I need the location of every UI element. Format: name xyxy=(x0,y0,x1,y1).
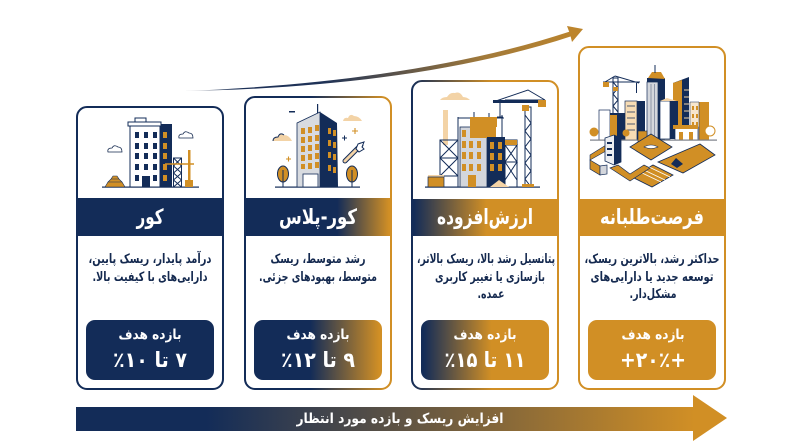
text: value add description: بازسازی یا تغییر کاربری xyxy=(435,270,545,285)
panel: core plus xyxy=(245,97,391,389)
target box: core plus: ۹ تا ۱۲٪ xyxy=(281,348,355,372)
target box: opportunistic: +۲۰٪+ xyxy=(620,348,686,372)
curved growth arrow xyxy=(184,26,583,91)
header: core plus: کور-پلاس xyxy=(279,205,358,229)
text: value add description: پتانسیل رشد بالا، ریسک بالاتر، xyxy=(417,252,555,267)
header: opportunistic xyxy=(579,199,725,236)
panel: core xyxy=(77,107,223,389)
target box: core: بازده هدف xyxy=(118,327,182,343)
icon: opportunistic development xyxy=(590,65,717,187)
text: core description xyxy=(88,250,212,285)
target box: value add: بازده هدف xyxy=(454,327,516,343)
text: opportunistic description: توسعه جدید یا دارایی‌های xyxy=(590,270,714,285)
text: opportunistic description: حداکثر رشد، بالاترین ریسک، xyxy=(584,252,720,267)
text: opportunistic description xyxy=(584,252,720,302)
target box: value add xyxy=(421,320,549,380)
target box: core plus xyxy=(254,320,382,380)
panel: value add xyxy=(412,81,558,389)
text: core plus description xyxy=(259,252,377,285)
icon: core building xyxy=(102,118,199,188)
header: core: کور xyxy=(136,205,164,229)
text: core description: درآمد پایدار، ریسک پایین، xyxy=(88,250,212,267)
text: core plus description: رشد متوسط، ریسک xyxy=(270,252,366,267)
target box: value add: ۱۱ تا ۱۵٪ xyxy=(444,348,526,372)
target box: core xyxy=(86,320,214,380)
header: value add: ارزش‌افزوده xyxy=(437,205,533,229)
header: value add xyxy=(412,199,558,236)
header: core plus xyxy=(245,198,391,236)
header: opportunistic: فرصت‌طلبانه xyxy=(600,205,704,229)
text: value add description xyxy=(417,252,555,302)
icon: core plus building xyxy=(273,104,364,188)
panel: opportunistic xyxy=(579,47,725,389)
text: value add description: عمده. xyxy=(478,287,504,302)
header: core xyxy=(77,198,223,236)
target box: core plus: بازده هدف xyxy=(286,327,350,343)
icon: value add construction xyxy=(425,90,546,188)
target box: core: ۷ تا ۱۰٪ xyxy=(113,348,187,372)
text: opportunistic description: مشکل‌دار. xyxy=(630,287,676,302)
text: core plus description: متوسط، بهبودهای جزئی. xyxy=(259,270,377,285)
bottom arrow: increasing risk and expected return: افزایش ریسک و بازده مورد انتظار xyxy=(296,411,504,427)
bottom arrow: increasing risk and expected return xyxy=(76,395,727,441)
text: core description: دارایی‌های با کیفیت بالا. xyxy=(92,270,208,285)
target box: opportunistic xyxy=(588,320,716,380)
target box: opportunistic: بازده هدف xyxy=(622,327,684,343)
